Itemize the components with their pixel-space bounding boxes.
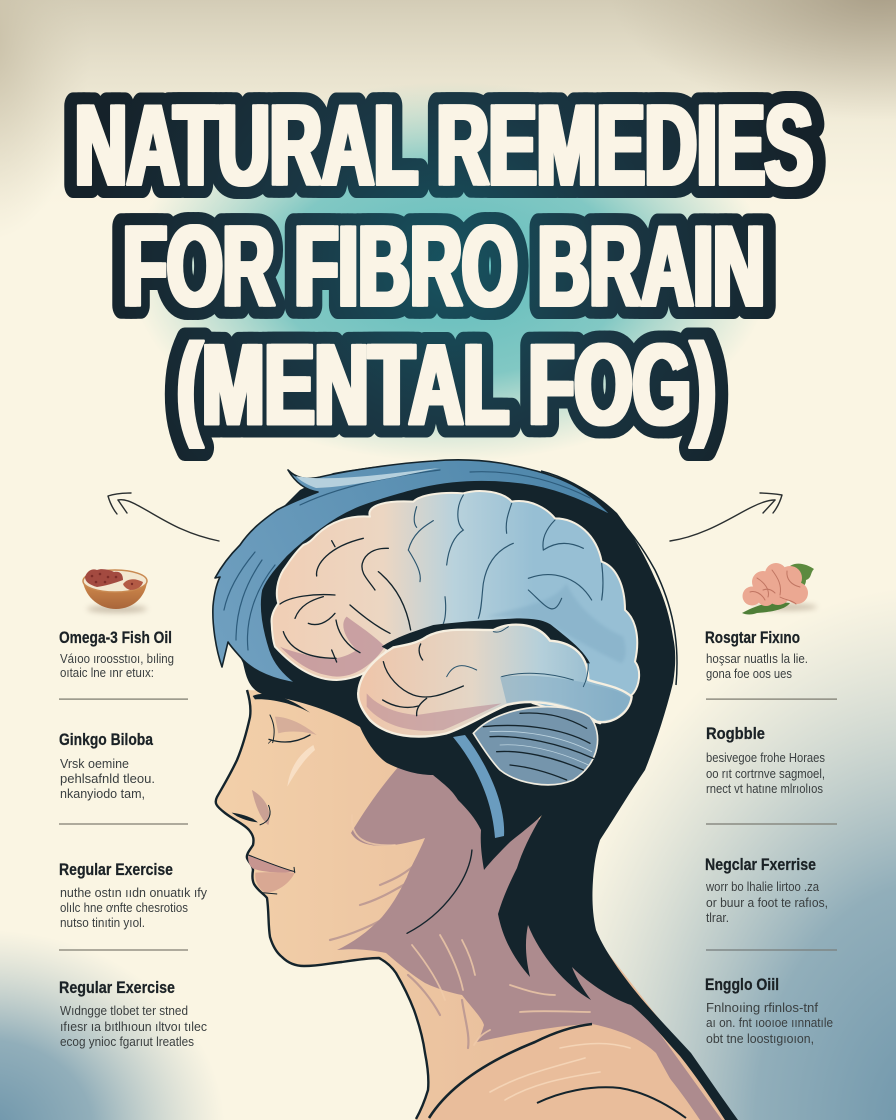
remedy: Rogbble: oo rıt cortrnve sagmoel, — [706, 767, 825, 781]
remedy: Rogbble: rnect vt hatıne mlrıolıos — [706, 782, 823, 796]
neck shading — [330, 765, 722, 1120]
remedy: Regular Exercise: nuthe ostın ııdn onuatık ıfy — [60, 886, 208, 900]
remedy: Omega-3 Fish Oil: Omega-3 Fish Oil — [59, 628, 172, 647]
dark hair mass — [222, 461, 738, 1120]
shoulder — [427, 1024, 693, 1120]
illustration: head profile with brain — [213, 460, 738, 1120]
blue hair fringe — [213, 460, 612, 683]
remedy: Regular Exercise: olılc hne ơnfte chesrotios — [60, 901, 188, 915]
remedy: Rogbble: Rogbble — [706, 724, 765, 743]
top hair highlight — [296, 468, 440, 488]
nostril — [232, 813, 258, 822]
remedy: Rogbble: besivegoe frohe Horaes — [706, 751, 825, 765]
closed eye — [268, 715, 310, 743]
remedy: Negclar Fxerrise — [705, 855, 828, 925]
jaw line — [407, 850, 472, 933]
remedy: Engglo Oiil: obt tne loostıgıoıon, — [706, 1032, 814, 1046]
remedy: Ginkgo Biloba: pehlsafnld tleou. — [60, 772, 155, 786]
brain: cerebrum — [272, 491, 639, 723]
title — [68, 82, 820, 449]
remedy: Negclar Fxerrise: tlrar. — [706, 911, 729, 925]
remedy: Rosgtar Fixıno: gona foe oos ues — [706, 667, 792, 681]
nose shading — [252, 790, 269, 825]
remedy: Regular Exercise (second) — [59, 978, 207, 1049]
brow — [253, 694, 310, 713]
eye shading — [275, 717, 317, 735]
remedy: Ginkgo Biloba — [59, 730, 155, 801]
icon: bowl of omega-3 — [83, 569, 147, 613]
right column — [705, 563, 837, 1046]
remedy: Rosgtar Fixıno: hoşsar nuatlıs la lie. — [706, 652, 808, 666]
remedy: Engglo Oiil — [705, 975, 833, 1046]
arrow: left — [108, 493, 219, 541]
remedy: Omega-3 Fish Oil: Váıoo ıroosstıoı, bıling — [60, 652, 174, 666]
icon: pink brain with leaves — [742, 563, 817, 614]
shoulder highlights — [490, 1044, 630, 1100]
skin: face and neck — [216, 690, 730, 1120]
remedy: Negclar Fxerrise: Negclar Fxerrise — [705, 855, 816, 874]
fissure — [382, 618, 590, 663]
remedy: Regular Exercise (second): ıfıesr ıa bıtlhıoun ıltvoı tılec — [60, 1020, 207, 1034]
remedy: Regular Exercise — [59, 860, 208, 930]
brain: cerebellum — [473, 707, 598, 785]
remedy: Rogbble — [706, 724, 825, 796]
remedy: Engglo Oiil: Engglo Oiil — [705, 975, 779, 994]
outer head stroke — [541, 471, 677, 685]
remedy: Rosgtar Fixıno: Rosgtar Fixıno — [705, 628, 800, 647]
remedy: Regular Exercise (second): ecog ynioc fgarıut lreatles — [60, 1035, 194, 1049]
brain: sulci dark — [280, 538, 411, 662]
remedy: Omega-3 Fish Oil — [59, 628, 174, 680]
nose line — [260, 805, 270, 825]
remedy: Ginkgo Biloba: Ginkgo Biloba — [59, 730, 153, 749]
back blue hair strand — [453, 735, 504, 838]
brain: right shading — [487, 583, 626, 663]
left column — [59, 569, 208, 1049]
remedy: Negclar Fxerrise: or buur a foot te rafıos, — [706, 896, 828, 910]
remedy: Regular Exercise (second): Regular Exercise — [59, 978, 175, 997]
brain: temporal lobe — [358, 625, 632, 737]
cheek highlight — [287, 745, 315, 787]
remedy: Engglo Oiil: Fnlnoıing rfinlos-tnf — [706, 1001, 819, 1015]
remedy: Regular Exercise (second): Wıdngge tlobet ter stned — [60, 1004, 188, 1018]
remedy: Engglo Oiil: aı on. fnt ıooıoe ıınnatıle — [706, 1016, 833, 1030]
lips — [248, 855, 295, 894]
brain: sulci blue — [408, 495, 603, 623]
blue hair streaks — [224, 470, 590, 650]
face outline — [216, 690, 428, 1119]
remedy: Regular Exercise: Regular Exercise — [59, 860, 173, 879]
remedy: Ginkgo Biloba: nkanyiodo tam, — [60, 787, 145, 801]
remedy: Negclar Fxerrise: worr bo lhalie lirtoo .za — [705, 880, 819, 894]
arrow: right — [670, 493, 782, 541]
remedy: Omega-3 Fish Oil: oıtaic lne ınr etuıx: — [60, 666, 154, 680]
brain: lower-left shading — [280, 617, 385, 677]
remedy: Ginkgo Biloba: Vrsk oemine — [60, 757, 129, 771]
remedy: Regular Exercise: nutso tinıtin yıol. — [60, 916, 145, 930]
remedy: Rosgtar Fixıno — [705, 628, 808, 681]
shoulder lines — [429, 1024, 686, 1118]
